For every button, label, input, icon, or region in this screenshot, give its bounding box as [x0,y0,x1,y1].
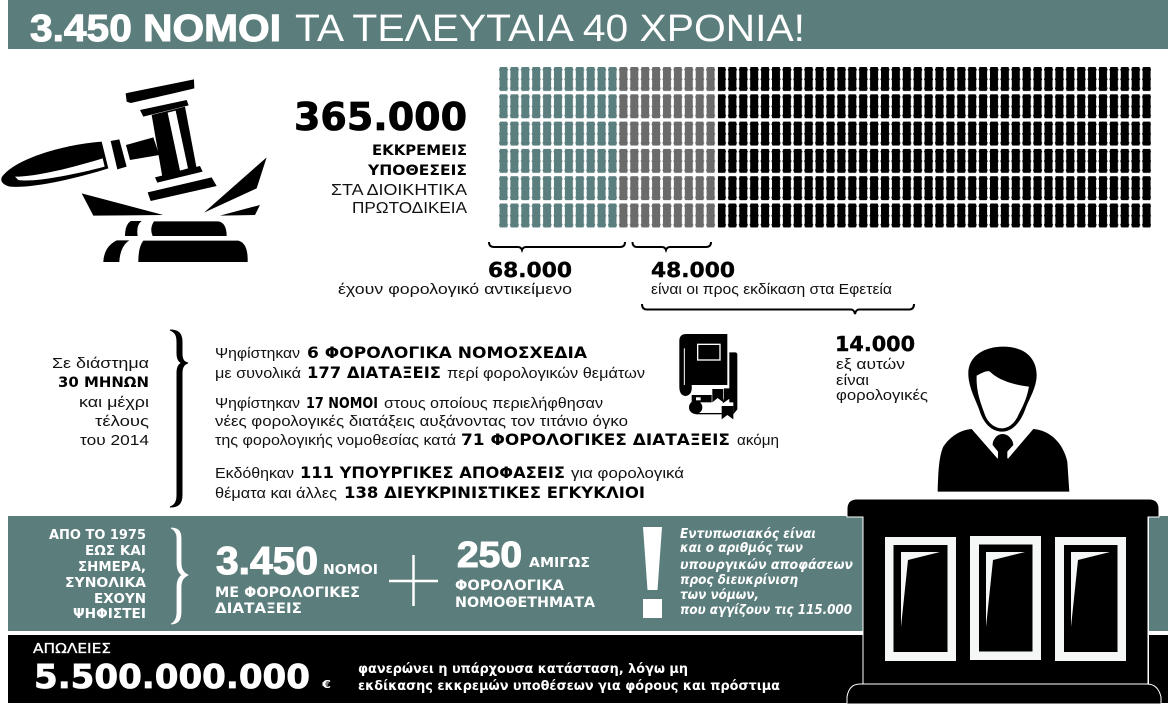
stat: 68.000: 68.000 [488,258,572,282]
stat: 48.000: είναι οι προς εκδίκαση στα Εφετεία [651,281,892,298]
stat: losses: 5.500.000.000 [34,657,310,696]
desk panel: right [1055,537,1126,661]
icon: gavel [1,79,267,262]
desk panel: centre [970,536,1041,660]
brace: 14.000 [642,304,914,314]
stat: 68.000: έχουν φορολογικό αντικείμενο [338,281,572,298]
panel: teal band [8,516,1168,631]
period label: 30 months: τέλους [95,413,149,430]
text: ministerial decisions note: και ο αριθμός των [680,541,803,556]
stat: 14.000: φορολογικές [836,387,928,404]
stat: 14.000: 14.000 [835,332,915,356]
stat: 68.000 [338,258,572,298]
text: losses explanation [358,662,780,694]
pictogram chart: case files [499,67,1151,229]
text block: tax legislation [215,343,779,502]
stat: losses: ΑΠΩΛΕΙΕΣ [33,641,111,657]
stat: 3.450 laws [215,540,378,617]
text block: tax legislation: θέματα και άλλες [215,485,337,502]
period label: 30 months: του 2014 [80,432,149,449]
text block: tax legislation: για φορολογικά [571,465,684,482]
icon: judge [938,347,1069,492]
icon: plus [389,555,438,606]
text: ministerial decisions note: προς διευκρίνιση [680,573,798,588]
text block: tax legislation: 177 ΔΙΑΤΑΞΕΙΣ [307,363,441,382]
headline stat: 365.000 pending cases: ΕΚΚΡΕΜΕΙΣ [372,143,467,159]
text block: tax legislation: 6 ΦΟΡΟΛΟΓΙΚΑ ΝΟΜΟΣΧΕΔΙΑ [307,343,588,362]
text block: tax legislation: 17 ΝΟΜΟΙ [306,394,378,412]
stat: 3.450 laws: ΜΕ ΦΟΡΟΛΟΓΙΚΕΣ [215,585,360,601]
text block: tax legislation: της φορολογικής νομοθεσίας κατά [215,432,456,449]
text: since 1975: ΑΠΟ ΤΟ 1975 [49,528,146,543]
stat: losses [33,641,331,696]
stat: losses: € [321,678,331,691]
large brace [170,330,188,507]
stat: 48.000 [651,258,892,298]
stat: 250 tax acts: ΑΜΙΓΩΣ [529,555,590,571]
text: ministerial decisions note: των νόμων, [680,588,759,603]
text: since 1975: ΨΗΦΙΣΤΕΙ [73,607,146,622]
text block: tax legislation: ακόμη [737,432,779,449]
period label: 30 months: και μέχρι [79,394,149,411]
text block: tax legislation: 71 ΦΟΡΟΛΟΓΙΚΕΣ ΔΙΑΤΑΞΕΙΣ [461,430,730,449]
text block: tax legislation: 138 ΔΙΕΥΚΡΙΝΙΣΤΙΚΕΣ ΕΓΚΥΚΛΙΟΙ [344,483,645,502]
text: since 1975: ΕΩΣ ΚΑΙ [85,544,146,559]
text block: tax legislation: περί φορολογικών θεμάτων [447,365,645,382]
desk [847,499,1161,704]
text: since 1975: ΣΥΝΟΛΙΚΑ [65,576,146,591]
text: ministerial decisions note: Εντυπωσιακός είναι [680,527,816,542]
text block: tax legislation: 111 ΥΠΟΥΡΓΙΚΕΣ ΑΠΟΦΑΣΕΙΣ [300,463,565,482]
stat: 14.000 [835,332,928,404]
title band [8,0,1168,50]
text: ministerial decisions note [680,527,853,618]
text block: tax legislation: Ψηφίστηκαν [215,345,300,362]
brace: 48.000 [632,242,711,250]
title band: ΤΑ ΤΕΛΕΥΤΑΙΑ 40 ΧΡΟΝΙΑ! [295,8,805,50]
icon: law books [679,334,737,419]
text: since 1975 [49,528,146,622]
text: since 1975: ΣΗΜΕΡΑ, [78,560,146,575]
headline stat: 365.000 pending cases: ΠΡΩΤΟΔΙΚΕΙΑ [352,200,467,217]
stat: 3.450 laws: ΝΟΜΟΙ [323,562,378,578]
stat: 250 tax acts [455,534,596,611]
text block: tax legislation: νέες φορολογικές διατάξεις αυξάνοντας τον τιτάνιο όγκο [215,413,628,430]
headline stat: 365.000 pending cases: 365.000 [294,95,467,139]
period label: 30 months [52,355,149,449]
text: since 1975: ΕΧΟΥΝ [94,592,146,607]
text block: tax legislation: με συνολικά [215,365,301,382]
stat: 48.000: 48.000 [651,258,735,282]
period label: 30 months: Σε διάστημα [52,355,149,372]
icon: exclamation mark [643,527,662,618]
headline stat: 365.000 pending cases: ΣΤΑ ΔΙΟΙΚΗΤΙΚΑ [331,182,467,199]
text: ministerial decisions note: που αγγίζουν τις 115.000 [680,603,852,618]
text block: tax legislation: Εκδόθηκαν [215,465,294,482]
desk panel: left [885,537,956,661]
stat: 14.000: είναι [836,372,869,389]
stat: 3.450 laws: 3.450 [216,540,318,583]
stat: 250 tax acts: ΦΟΡΟΛΟΓΙΚΑ [455,578,565,594]
headline stat: 365.000 pending cases: ΥΠΟΘΕΣΕΙΣ [367,163,467,179]
text: losses explanation: φανερώνει η υπάρχουσα κατάσταση, λόγω μη [358,662,688,677]
white brace [171,528,188,624]
stat: 14.000: εξ αυτών [836,356,905,373]
panel: black losses band [8,635,1168,703]
stat: 250 tax acts: ΝΟΜΟΘΕΤΗΜΑΤΑ [455,595,596,611]
stat: 250 tax acts: 250 [457,534,522,575]
text block: tax legislation: στους οποίους περιελήφθησαν [384,395,603,412]
stat: 3.450 laws: ΔΙΑΤΑΞΕΙΣ [215,601,302,617]
brace: 68.000 [489,242,625,250]
title band: 3.450 ΝΟΜΟΙ [30,8,281,50]
text block: tax legislation: Ψηφίστηκαν [215,395,300,412]
period label: 30 months: 30 ΜΗΝΩΝ [58,375,149,391]
text: ministerial decisions note: υπουργικών αποφάσεων [680,558,853,573]
headline stat: 365.000 pending cases [294,95,467,217]
text: losses explanation: εκδίκασης εκκρεμών υποθέσεων για φόρους και πρόστιμα [358,679,780,694]
